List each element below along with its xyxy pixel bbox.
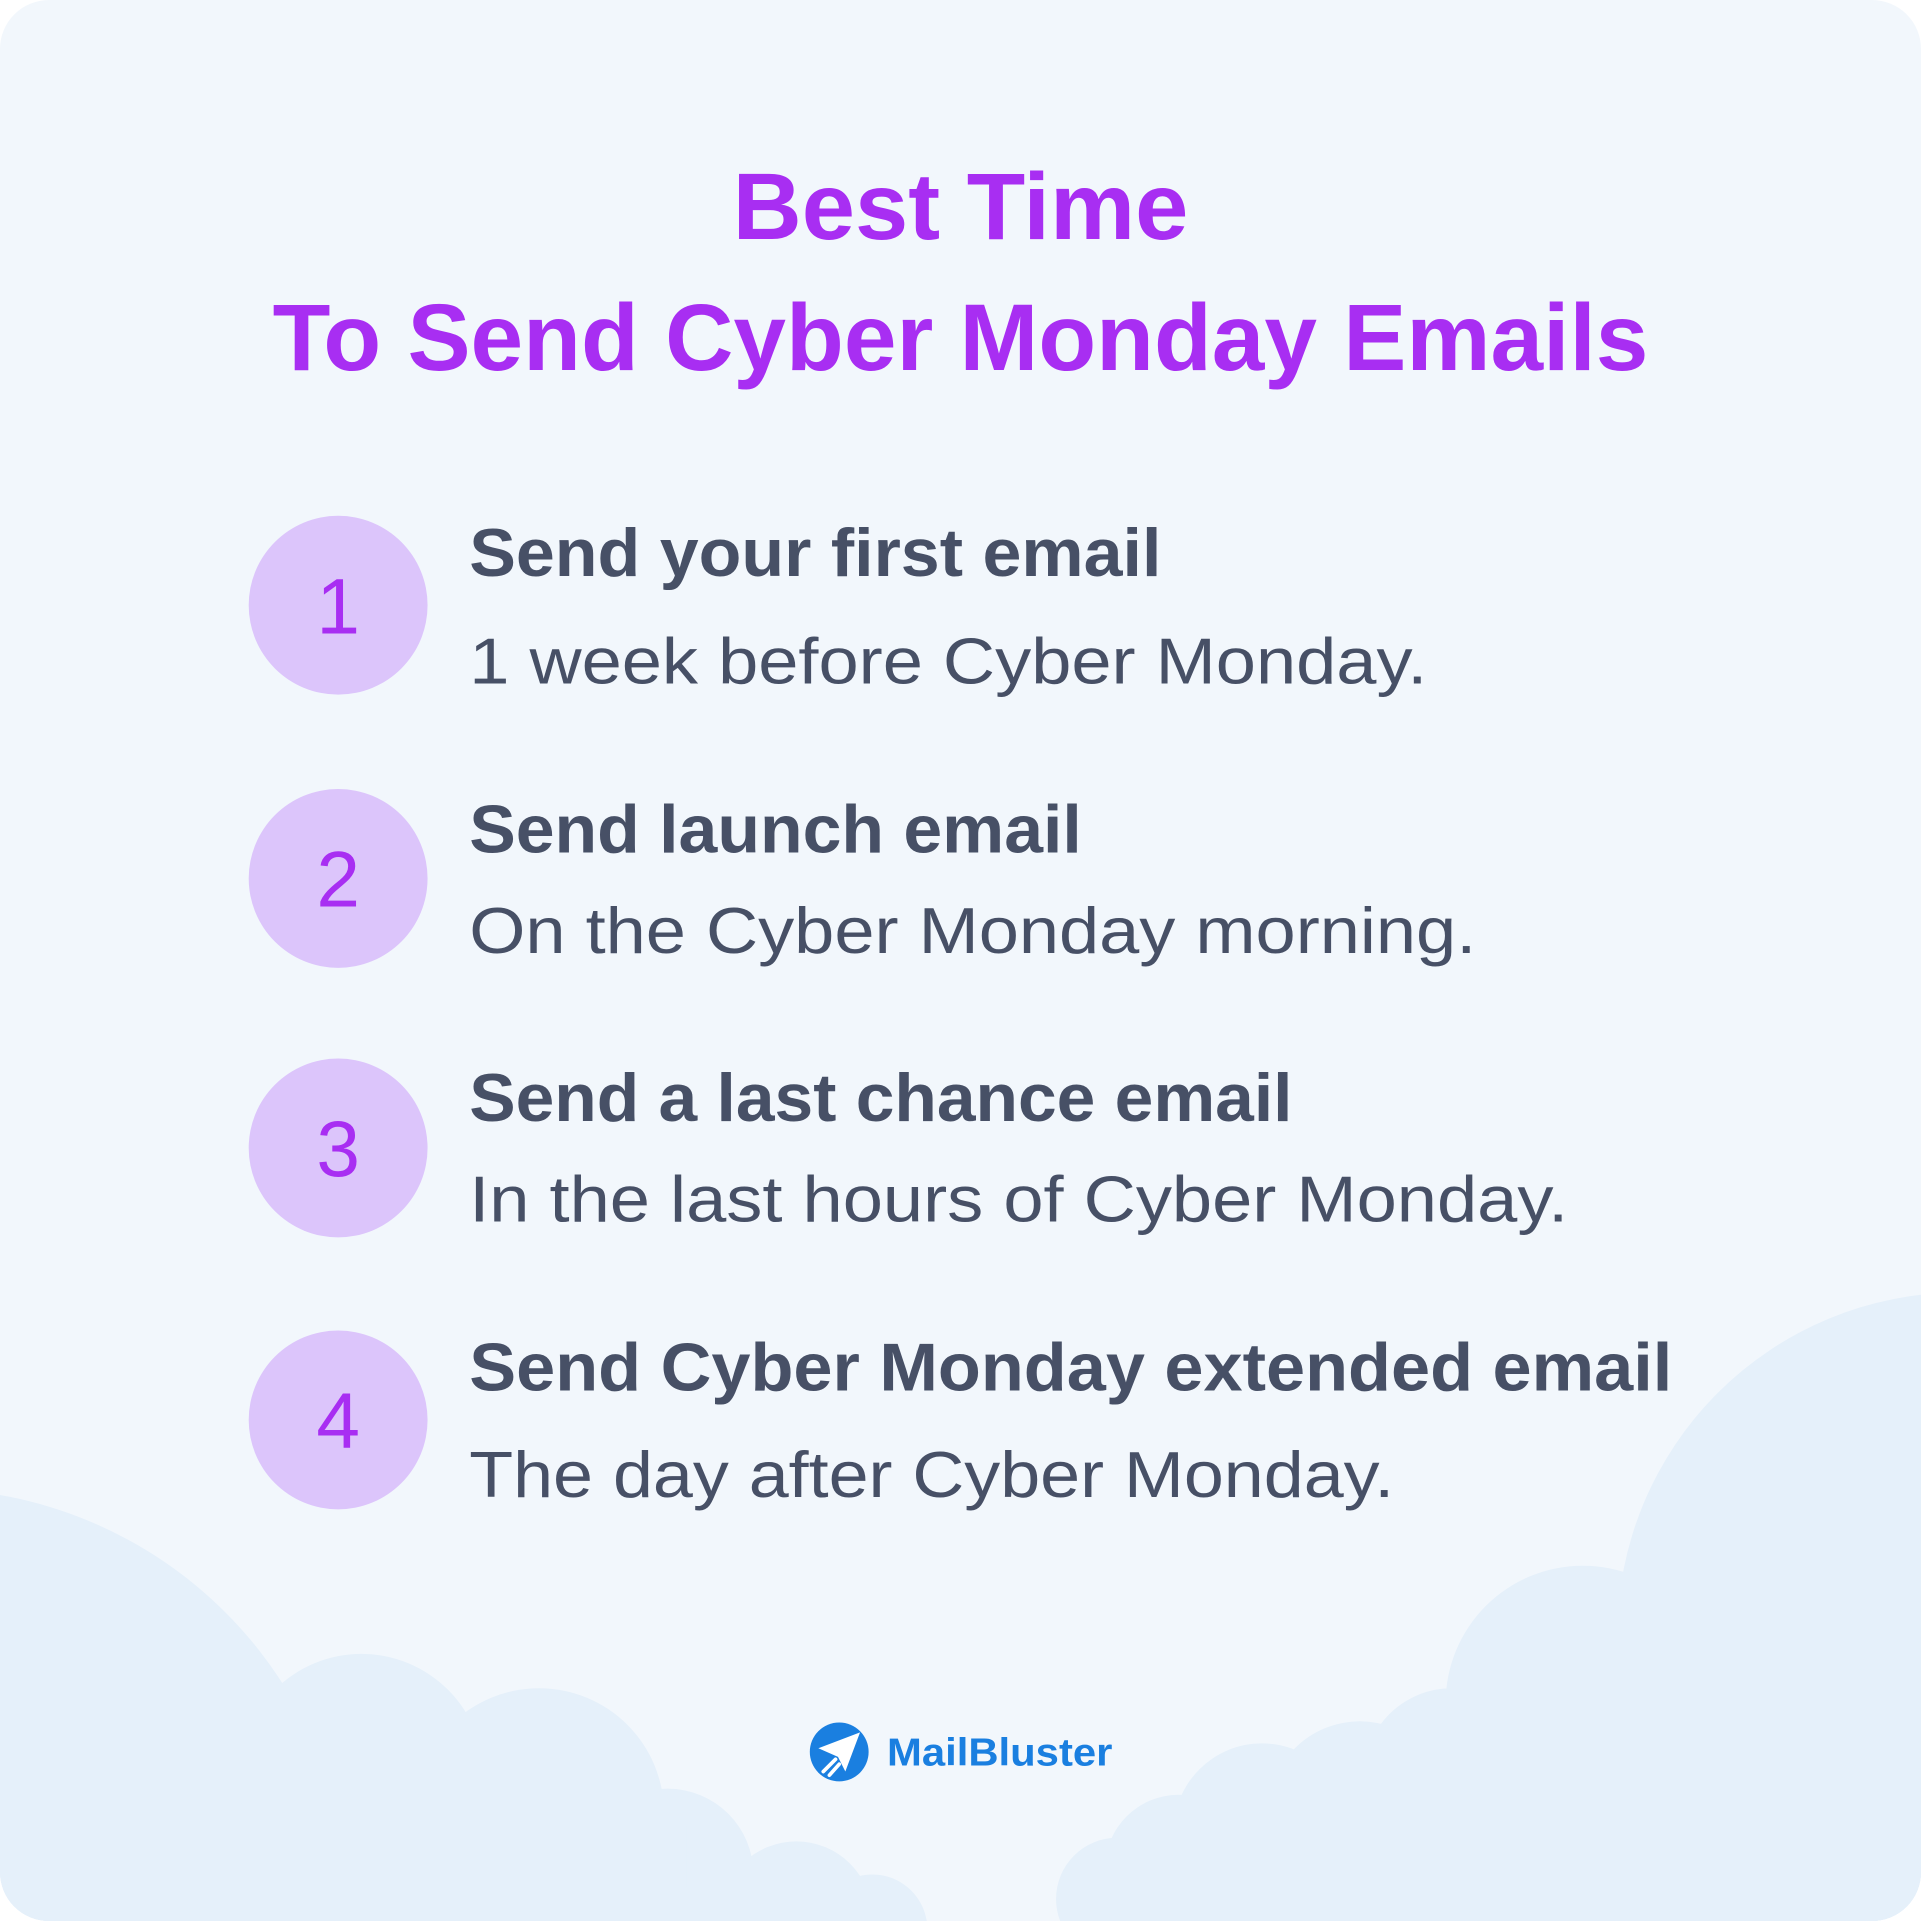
decorative clouds [0, 1293, 1921, 1921]
step 2: On the Cyber Monday morning. [469, 894, 1476, 967]
step 4: Send Cyber Monday extended email [469, 1331, 1672, 1406]
logo: MailBluster: MailBluster [887, 1731, 1112, 1774]
step 3: In the last hours of Cyber Monday. [469, 1162, 1568, 1235]
title [273, 154, 1648, 390]
step 1 [249, 516, 1427, 698]
title: Best Time [733, 154, 1188, 259]
step 2: Send launch email [469, 793, 1082, 868]
step 3: Send a last chance email [469, 1061, 1293, 1136]
step 1: 1 [316, 562, 360, 650]
step 3: 3 [316, 1105, 360, 1193]
title: To Send Cyber Monday Emails [273, 285, 1648, 390]
step 4: The day after Cyber Monday. [469, 1438, 1394, 1511]
step 2 [249, 789, 1476, 968]
step 3 [249, 1059, 1568, 1237]
icon: paper plane [810, 1723, 869, 1781]
step 2: 2 [316, 836, 360, 924]
step 4 [249, 1330, 1672, 1511]
step 4: 4 [316, 1377, 360, 1465]
step 1: Send your first email [469, 516, 1161, 591]
logo: MailBluster [810, 1723, 1112, 1781]
step 1: 1 week before Cyber Monday. [469, 625, 1427, 698]
